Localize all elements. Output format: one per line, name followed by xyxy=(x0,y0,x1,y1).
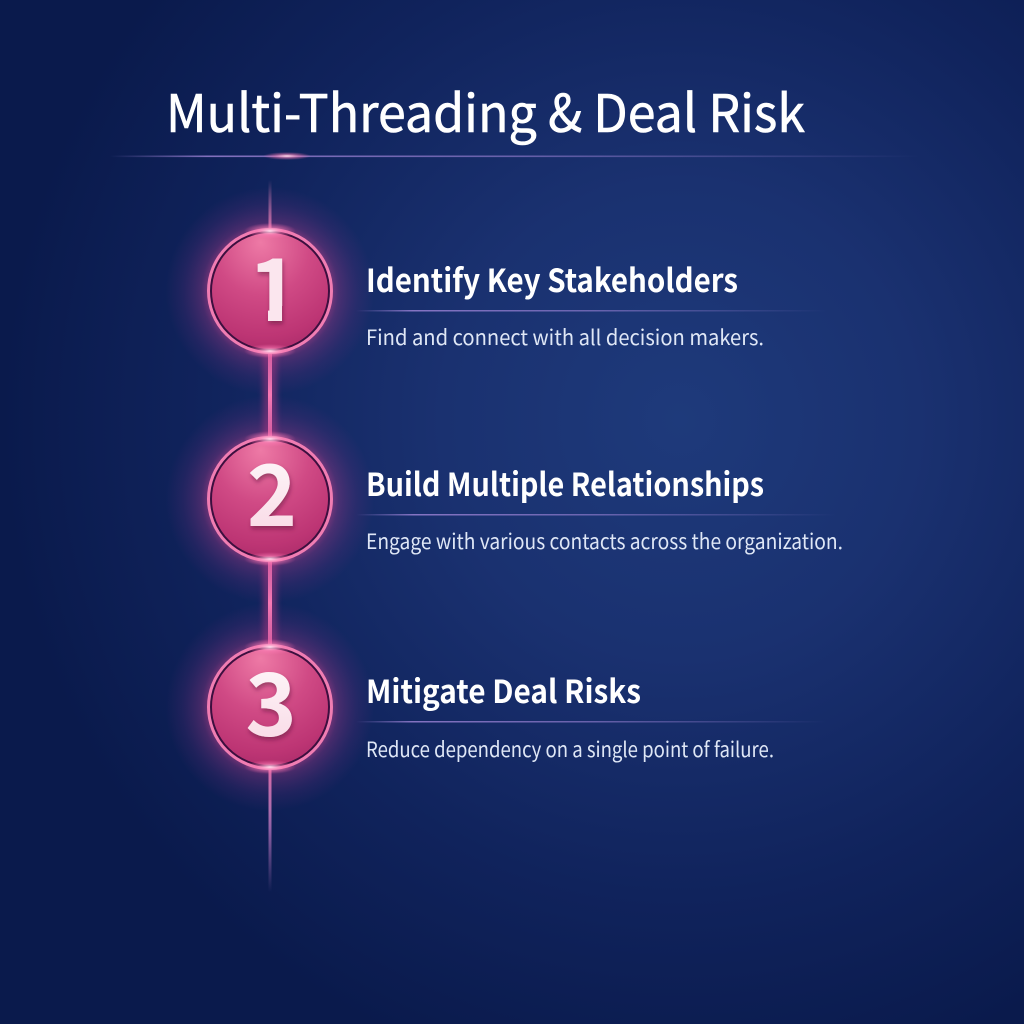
step 1 heading: Identify Key Stakeholders xyxy=(366,256,738,302)
title divider with glow xyxy=(110,152,920,160)
step 1 description: Find and connect with all decision makers. xyxy=(366,322,764,352)
step 3 description: Reduce dependency on a single point of failure. xyxy=(366,734,774,764)
step 1 rule xyxy=(356,310,826,312)
step 2 description: Engage with various contacts across the organization. xyxy=(366,526,843,556)
timeline connector xyxy=(263,180,277,892)
step 3 heading: Mitigate Deal Risks xyxy=(366,667,641,713)
step 1 badge xyxy=(174,194,366,388)
step 2 rule xyxy=(356,514,836,516)
step 1 text xyxy=(356,256,826,352)
number 2: 2 xyxy=(247,428,297,551)
step 2 heading: Build Multiple Relationships xyxy=(366,460,764,506)
title: Multi-Threading & Deal Risk xyxy=(166,72,805,147)
step 2 text xyxy=(356,460,843,556)
step 3 rule xyxy=(356,721,826,722)
number 1: 1 xyxy=(248,221,300,347)
step 2 badge xyxy=(166,395,374,603)
step 3 text xyxy=(356,667,826,764)
number 3: 3 xyxy=(245,636,297,762)
step 3 badge xyxy=(166,603,374,811)
